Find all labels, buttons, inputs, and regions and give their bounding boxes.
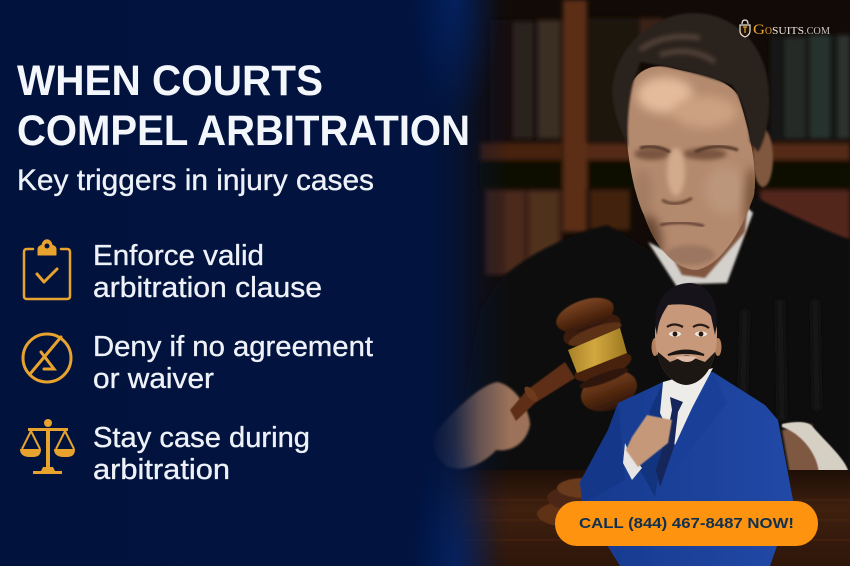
icon: circle with crossed symbol bbox=[23, 334, 71, 382]
judge right hand and cuff bbox=[782, 424, 822, 487]
title: COMPEL ARBITRATION bbox=[17, 107, 470, 155]
item text: arbitration clause bbox=[93, 272, 322, 304]
desk bbox=[440, 470, 850, 566]
item text: Enforce valid bbox=[93, 240, 264, 272]
item 1: enforce valid clause bbox=[24, 240, 322, 304]
gavel bbox=[510, 291, 643, 421]
icon: scales of justice bbox=[20, 419, 75, 474]
judge shirt collar bbox=[648, 205, 753, 287]
item text bbox=[93, 240, 322, 304]
attorney head bbox=[650, 283, 722, 390]
logo: GoSuits.com: .COM bbox=[804, 25, 830, 37]
attorney cuff bbox=[623, 443, 642, 480]
gavel handle bbox=[510, 362, 575, 421]
title bbox=[17, 57, 470, 155]
title: WHEN COURTS bbox=[17, 57, 323, 105]
item text bbox=[93, 331, 373, 395]
attorney smile bbox=[675, 356, 697, 362]
item text: Deny if no agreement bbox=[93, 331, 373, 363]
judge neck bbox=[655, 205, 748, 278]
judge hair bbox=[612, 13, 769, 152]
gavel gold band bbox=[568, 328, 627, 373]
background photo: bookshelves bbox=[430, 0, 850, 566]
left navy panel bbox=[0, 0, 510, 566]
icon: clipboard with check bbox=[24, 240, 70, 299]
attorney bbox=[580, 283, 793, 566]
item 3: stay case during arbitration bbox=[20, 419, 310, 486]
subtitle: Key triggers in injury cases bbox=[17, 164, 374, 197]
attorney moustache bbox=[668, 350, 704, 355]
gavel block bbox=[537, 478, 619, 528]
item 2: deny if no agreement bbox=[23, 331, 373, 395]
blue edge glow bottom bbox=[410, 436, 500, 566]
item text bbox=[93, 422, 310, 486]
logo shield icon bbox=[740, 20, 750, 37]
judge left hand bbox=[433, 382, 530, 469]
item text: Stay case during bbox=[93, 422, 310, 454]
judge ear bbox=[753, 129, 773, 187]
attorney suit bbox=[580, 372, 793, 566]
judge robe bbox=[450, 196, 850, 490]
attorney hand bbox=[626, 415, 672, 467]
attorney hair bbox=[655, 283, 717, 335]
item text: arbitration bbox=[93, 454, 230, 486]
call to action button: CALL (844) 467-8487 NOW! bbox=[579, 515, 794, 532]
ears bbox=[652, 338, 658, 356]
attorney beard bbox=[658, 352, 716, 385]
judge face bbox=[626, 66, 755, 270]
attorney eyes bbox=[667, 324, 709, 337]
logo: GoSuits.com: SUITS bbox=[772, 25, 804, 37]
call to action button bbox=[555, 501, 818, 546]
judge figure bbox=[501, 12, 850, 470]
item text: or waiver bbox=[93, 363, 214, 395]
logo: GoSuits.com: G bbox=[753, 22, 765, 38]
attorney shirt bbox=[660, 368, 713, 445]
logo: GoSuits.com: O bbox=[765, 25, 772, 37]
blue edge glow top bbox=[410, 0, 500, 130]
attorney lapel bbox=[657, 373, 727, 495]
gavel head bbox=[552, 291, 643, 419]
attorney tie bbox=[656, 397, 683, 487]
logo: GoSuits.com bbox=[740, 20, 830, 38]
